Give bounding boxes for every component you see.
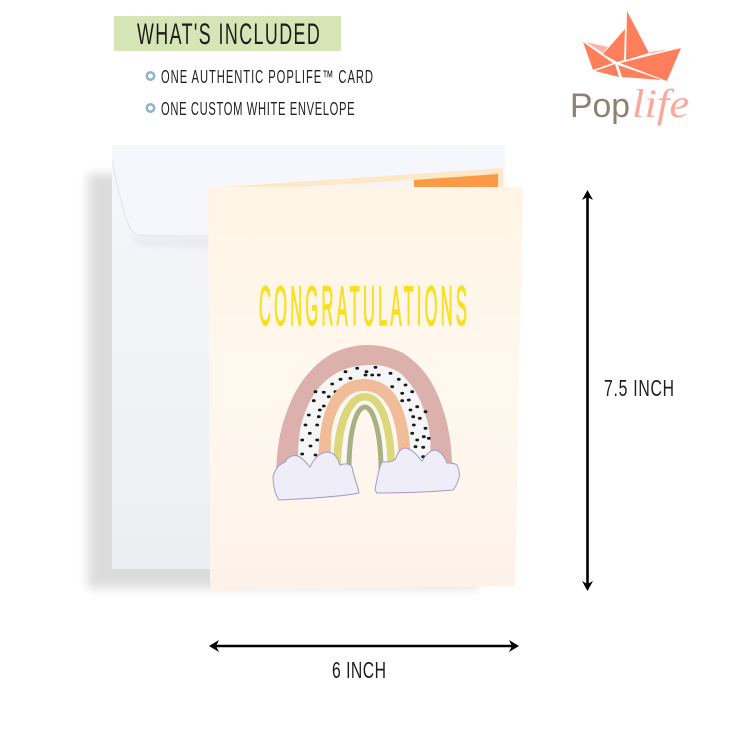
list of included items [147, 67, 373, 120]
list of included items: ONE AUTHENTIC POPLIFE™ CARD [161, 67, 373, 88]
left cloud [273, 452, 359, 500]
height label: 7.5 INCH [604, 376, 674, 402]
list of included items: ONE CUSTOM WHITE ENVELOPE [161, 99, 355, 120]
height arrow: 7.5 inch [582, 190, 593, 591]
right cloud [375, 448, 459, 493]
width arrow: 6 inch [209, 640, 519, 652]
logo: poplife paper boat: life [632, 82, 689, 126]
envelope with shadow [88, 145, 505, 588]
heading: what's included: WHAT'S INCLUDED [137, 19, 320, 51]
card title: CONGRATULATIONS [259, 275, 467, 337]
logo: poplife paper boat: Pop [570, 87, 630, 125]
logo: poplife paper boat [570, 11, 689, 126]
rainbow illustration [276, 345, 452, 505]
width label: 6 INCH [332, 658, 386, 684]
inner card page peeking out [223, 168, 503, 187]
greeting card front [208, 187, 523, 591]
polka dots [302, 367, 429, 457]
